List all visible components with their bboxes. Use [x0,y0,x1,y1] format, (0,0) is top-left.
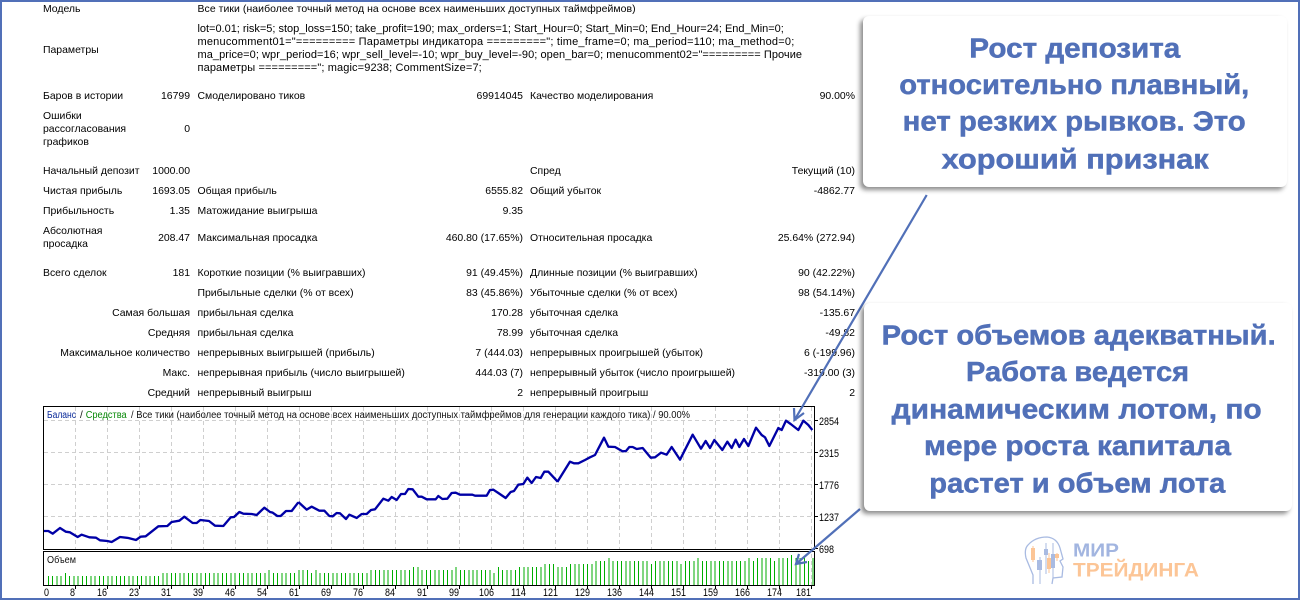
panel: test report statistics table: -319.00 (3) [804,368,855,379]
bottom axis labels: 0 [44,587,49,599]
panel: test report statistics table: Текущий (10) [792,166,855,177]
equity chart frame [44,406,814,550]
panel: test report statistics table: Баров в истории [43,91,123,102]
panel: test report statistics table: непрерывный убыток (число проигрышей) [530,368,735,379]
bottom axis labels: 121 [543,587,558,599]
bottom axis labels: 46 [225,587,235,599]
volume chart frame [44,552,814,586]
panel: test report statistics table: Параметры [43,45,99,56]
panel: test report statistics table: Ошибки [43,111,82,122]
panel: test report statistics table: Прибыльность [43,206,114,217]
bottom axis labels: 16 [97,587,107,599]
bottom axis labels: 91 [417,587,427,599]
panel: test report statistics table: menucomment01="========= Параметры индикатора ========="; time_frame=0; ma_period=110; ma_method=0; [198,36,794,48]
panel: test report statistics table: Макс. [163,368,190,379]
panel: test report statistics table: прибыльная сделка [198,328,293,339]
callout text: volume growth: Работа ведется [966,356,1189,387]
panel: test report statistics table: параметры ========="; magic=9238; CommentSize=7; [198,62,482,74]
panel: test report statistics table: Все тики (наиболее точный метод на основе всех наименьших доступных таймфреймов) [198,4,636,15]
panel: test report statistics table: 6 (-199.96) [804,348,855,359]
bottom axis labels: 106 [479,587,494,599]
panel: test report statistics table: 78.99 [497,328,523,339]
panel: test report statistics table: Чистая прибыль [43,186,122,197]
panel: test report statistics table: Самая большая [112,308,190,319]
panel: test report statistics table: Всего сделок [43,268,107,279]
right axis labels: 1776 [819,480,839,492]
panel: test report statistics table: 16799 [161,91,190,102]
panel: test report statistics table: 7 (444.03) [475,348,523,359]
right axis labels [819,416,839,556]
panel: test report statistics table: убыточная сделка [530,328,618,339]
bottom axis labels: 129 [575,587,590,599]
bottom axis labels: 69 [321,587,331,599]
panel: test report statistics table: Смоделировано тиков [198,91,305,102]
volume bars [48,555,813,585]
callout text: volume growth: динамическим лотом, по [892,393,1262,424]
panel: test report statistics table: непрерывных проигрышей (убыток) [530,348,703,359]
panel: test report statistics table: 9.35 [503,206,523,217]
bottom axis labels: 136 [607,587,622,599]
panel: test report statistics table: Средняя [148,328,190,339]
bottom axis labels: 114 [511,587,526,599]
chart: balance and volume [44,406,839,599]
panel: test report statistics table: рассогласования [43,124,126,135]
panel: test report statistics table: 69914045 [477,91,523,102]
panel: test report statistics table: 0 [184,124,190,135]
panel: test report statistics table: непрерывный выигрыш [198,388,312,399]
right axis labels: 1237 [819,512,839,524]
panel: test report statistics table: Короткие позиции (% выигравших) [198,268,366,279]
chart legend title: Средства [86,410,127,421]
callout text: deposit growth: хороший признак [942,143,1210,174]
panel: test report statistics table: просадка [43,239,88,250]
panel: test report statistics table: непрерывный проигрыш [530,388,648,399]
panel: test report statistics table: 444.03 (7) [475,368,523,379]
chart legend title: / [80,410,83,421]
callout text: deposit growth [899,32,1249,174]
panel: test report statistics table: 2 [849,388,855,399]
panel: test report statistics table: -49.82 [825,328,855,339]
panel: test report statistics table: Качество моделирования [530,91,653,102]
bottom axis labels: 99 [449,587,459,599]
panel: test report statistics table: Средний [148,388,190,399]
logo wordmark: МИР [1073,541,1119,561]
panel: test report statistics table: 1000.00 [152,166,190,177]
bottom axis labels: 174 [767,587,782,599]
arrow: callout to volume bars [796,509,860,564]
panel: test report statistics table: 98 (54.14%) [798,288,855,299]
panel: callout volume growth [864,303,1292,511]
axis ticks [76,420,818,589]
panel: test report statistics table: 2 [517,388,523,399]
callout text: volume growth: Рост объемов адекватный. [882,319,1276,350]
panel: test report statistics table: 25.64% (272.94) [778,233,855,244]
panel: test report statistics table: -135.67 [820,308,855,319]
panel: test report statistics table: графиков [43,137,89,148]
bottom axis labels: 61 [289,587,299,599]
bottom axis labels: 151 [671,587,686,599]
bottom axis labels: 54 [257,587,267,599]
bottom axis labels: 181 [796,587,811,599]
bottom axis labels: 159 [703,587,718,599]
panel: test report statistics table: ma_price=0; wpr_period=16; wpr_sell_level=-10; wpr_buy_level=-90; open_bar=0; menucomment02="========= Прочие [198,49,802,61]
balance line [44,421,812,542]
arrow: callout to balance curve [794,195,927,420]
panel: test report statistics table: -4862.77 [814,186,855,197]
panel: test report statistics table [43,4,855,399]
panel: test report statistics table: Длинные позиции (% выигравших) [530,268,698,279]
callout text: volume growth: растет и объем лота [929,467,1226,498]
panel: test report statistics table: Начальный депозит [43,166,140,177]
panel: test report statistics table: 1693.05 [152,186,190,197]
panel: test report statistics table: Модель [43,4,80,15]
panel: test report statistics table: 90.00% [820,91,855,102]
panel: test report statistics table: lot=0.01; risk=5; stop_loss=150; take_profit=190; max_orders=1; Start_Hour=0; Start_Min=0; End_Hour=24; End_Min=0; [198,23,784,35]
panel: test report statistics table: 181 [173,268,190,279]
panel: test report statistics table: 83 (45.86%) [466,288,523,299]
panel: test report statistics table: Максимальное количество [60,348,190,359]
bottom axis labels: 144 [639,587,654,599]
bottom axis labels: 76 [353,587,363,599]
right axis labels: 2315 [819,448,839,460]
panel: test report statistics table: Убыточные сделки (% от всех) [530,288,678,299]
chart legend title: / Все тики (наиболее точный метод на основе всех наименьших доступных таймфреймов для генерации каждого тика) / 90.00% [131,409,690,421]
bottom axis labels [44,587,811,599]
panel: test report statistics table: убыточная сделка [530,308,618,319]
chart legend title: Баланс [47,410,76,421]
panel: test report statistics table: Относительная просадка [530,233,652,244]
panel: test report statistics table: прибыльная сделка [198,308,293,319]
panel: test report statistics table: 6555.82 [485,186,523,197]
bottom axis labels: 31 [161,587,171,599]
icon: head with candlesticks [1025,537,1063,584]
callout text: volume growth: мере роста капитала [924,430,1231,461]
callout text: volume growth [882,319,1276,498]
panel: test report statistics table: Общий убыток [530,186,601,197]
panel: test report statistics table: Спред [530,166,561,177]
panel: test report statistics table: Прибыльные сделки (% от всех) [198,288,354,299]
panel: test report statistics table: 208.47 [158,233,190,244]
panel: callout deposit growth [863,16,1287,187]
panel: test report statistics table: 90 (42.22%) [798,268,855,279]
bottom axis labels: 84 [385,587,395,599]
panel: test report statistics table: Абсолютная [43,226,102,237]
bottom axis labels: 166 [735,587,750,599]
bottom axis labels: 39 [193,587,203,599]
panel: test report statistics table: Максимальная просадка [198,233,317,244]
bottom axis labels: 8 [70,587,75,599]
right axis labels: 698 [819,544,834,556]
panel: test report statistics table: непрерывных выигрышей (прибыль) [198,348,375,359]
panel: test report statistics table: 1.35 [170,206,190,217]
panel: test report statistics table: 170.28 [491,308,523,319]
right axis labels: 2854 [819,416,839,428]
callout text: deposit growth: относительно плавный, [899,69,1249,100]
panel: test report statistics table: 460.80 (17.65%) [446,233,523,244]
panel: test report statistics table: непрерывная прибыль (число выигрышей) [198,368,405,379]
logo: Мир Трейдинга: ТРЕЙДИНГА [1073,560,1199,582]
bottom axis labels: 23 [129,587,139,599]
panel: test report statistics table: Матожидание выигрыша [198,206,317,217]
panel: test report statistics table: Общая прибыль [198,186,277,197]
logo: Мир Трейдинга [1025,537,1199,584]
volume label: Объем [47,554,76,566]
panel: test report statistics table: 91 (49.45%) [466,268,523,279]
callout text: deposit growth: нет резких рывков. Это [903,106,1246,137]
callout text: deposit growth: Рост депозита [969,32,1181,63]
